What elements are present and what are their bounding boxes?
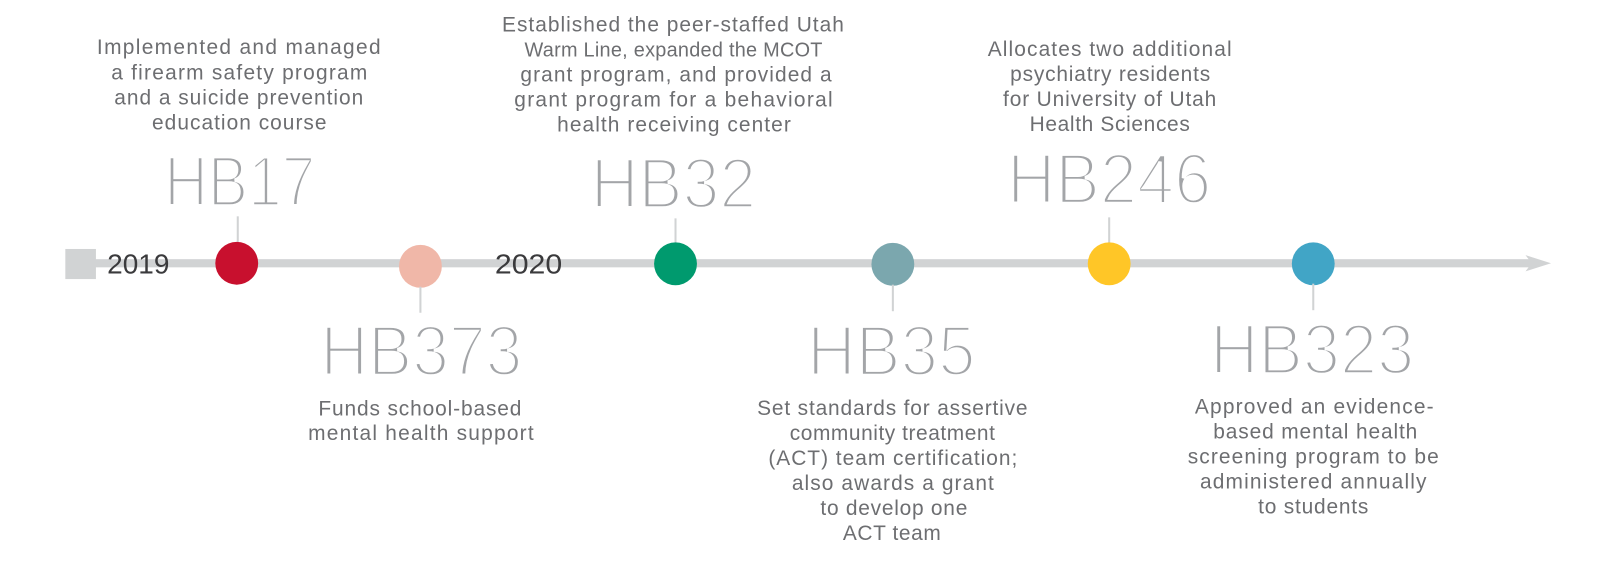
milestone: HB246 (988, 38, 1232, 285)
HB17 description: education course (152, 112, 327, 135)
HB32 description: Established the peer-staffed Utah (502, 14, 844, 37)
timeline axis with arrow (65, 249, 1551, 279)
HB323 description (1188, 395, 1439, 518)
HB246 connector (1108, 217, 1110, 244)
HB323 description: based mental health (1213, 420, 1417, 443)
HB17 description: a firearm safety program (111, 62, 367, 85)
HB373 heading: HB373 (320, 312, 522, 392)
HB17 heading: HB17 (164, 142, 315, 222)
HB32 heading: HB32 (591, 144, 756, 224)
HB246 description: Health Sciences (1030, 113, 1190, 136)
milestone: HB32 (502, 14, 844, 285)
milestone: HB323 (1188, 242, 1439, 518)
HB35 description: also awards a grant (792, 472, 994, 495)
HB373 connector (419, 287, 421, 313)
HB323 description: to students (1258, 495, 1368, 518)
HB373 description: mental health support (308, 422, 534, 445)
HB32 description: grant program, and provided a (520, 64, 832, 87)
HB246 description: Allocates two additional (988, 38, 1232, 61)
HB32 description: Warm Line, expanded the MCOT (524, 40, 822, 62)
HB17 marker (215, 242, 258, 285)
HB323 description: screening program to be (1188, 445, 1439, 468)
HB35 description: community treatment (790, 422, 995, 445)
HB35 description: to develop one (820, 497, 967, 520)
HB17 description: and a suicide prevention (114, 87, 363, 110)
HB246 heading: HB246 (1007, 140, 1211, 220)
HB246 marker (1088, 242, 1131, 285)
HB246 description: for University of Utah (1003, 88, 1216, 111)
HB323 connector (1312, 284, 1314, 310)
HB323 description: Approved an evidence- (1195, 395, 1434, 418)
HB17 description: Implemented and managed (97, 36, 381, 59)
HB32 connector (674, 218, 677, 245)
HB17 connector (237, 216, 239, 243)
HB373 description: Funds school-based (318, 397, 521, 420)
HB32 description (502, 14, 844, 137)
HB35 heading: HB35 (807, 312, 976, 392)
HB246 description: psychiatry residents (1010, 63, 1210, 86)
HB246 description (988, 38, 1232, 136)
HB32 marker (654, 242, 697, 285)
HB373 marker (399, 245, 442, 288)
HB35 connector (892, 285, 894, 311)
milestone: HB35 (757, 243, 1028, 545)
HB32 description: health receiving center (557, 114, 791, 137)
HB32 description: grant program for a behavioral (514, 89, 833, 112)
HB323 marker (1292, 242, 1335, 285)
year label: 2020: 2020 (495, 248, 562, 279)
HB35 description: (ACT) team certification; (768, 447, 1017, 470)
HB373 description (308, 397, 534, 445)
milestone: HB373 (308, 245, 534, 445)
HB35 description: Set standards for assertive (757, 397, 1028, 420)
HB35 description: ACT team (843, 522, 941, 545)
HB323 heading: HB323 (1210, 310, 1414, 390)
milestone: HB17 (97, 36, 381, 285)
year label: 2019: 2019 (107, 248, 169, 279)
HB323 description: administered annually (1200, 470, 1427, 493)
HB35 marker (871, 243, 914, 286)
HB35 description (757, 397, 1028, 545)
HB17 description (97, 36, 381, 135)
